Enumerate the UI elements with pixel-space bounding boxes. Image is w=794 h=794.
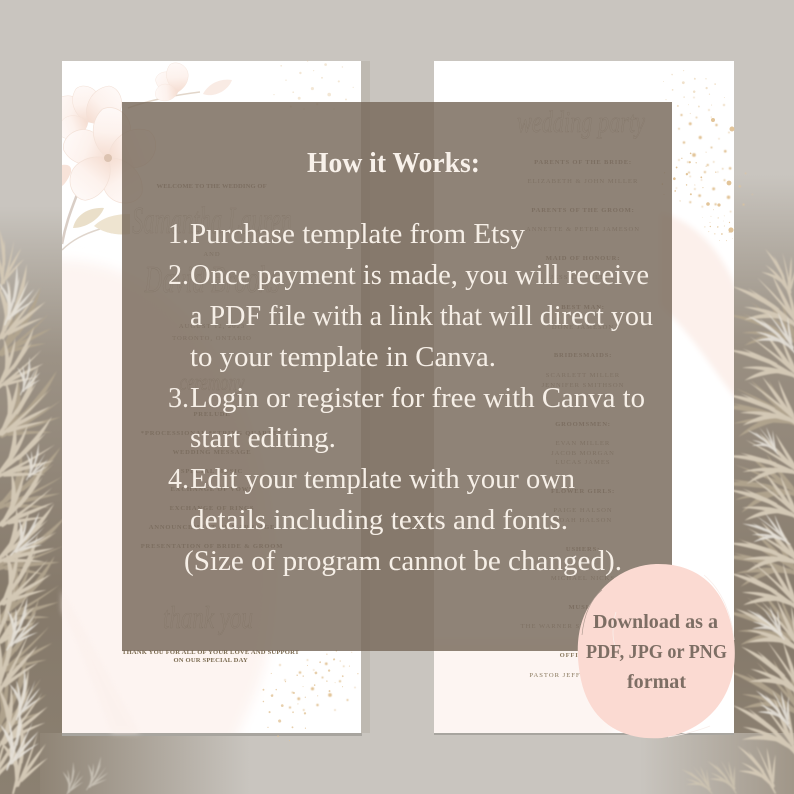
step 4: details including texts and fonts. (190, 505, 568, 536)
wedding party list: EVAN MILLER (556, 440, 610, 447)
gold speckles top right 4 (653, 143, 723, 210)
wedding party list: JESSICA MILLER (550, 274, 616, 281)
invitation text: WEDDING MESSAGE (173, 449, 251, 456)
panel: how it works overlay (122, 102, 672, 651)
step 3 (168, 383, 645, 454)
invitation text: Samantha Lauren (132, 200, 292, 242)
callout text: format (627, 671, 686, 693)
invitation text: thank you (163, 599, 253, 635)
wedding party list: JACOB MORGAN (551, 450, 615, 457)
flower buds (73, 208, 104, 228)
invitation text: AND (203, 251, 221, 258)
step 1: 1. (168, 219, 189, 250)
step 2: to your template in Canva. (190, 342, 496, 373)
invitation text: WELCOME TO THE WEDDING OF (156, 183, 268, 190)
wedding party list (517, 104, 645, 630)
wedding party list: MAID OF HONOUR: (546, 255, 620, 262)
watercolor wash (62, 262, 266, 733)
watercolor wash bottom (434, 651, 612, 733)
invitation text: EXCHANGE OF RINGS (170, 505, 254, 512)
wedding party list: MICHAEL NICKS (551, 575, 615, 582)
top bud (203, 80, 232, 95)
left edge petal (62, 165, 71, 186)
step 1: Purchase template from Etsy (190, 219, 525, 250)
step 4: Edit your template with your own (190, 464, 575, 495)
invitation text: TORONTO, ONTARIO (172, 335, 252, 342)
numbered steps (168, 219, 653, 577)
callout dark scratch (582, 590, 602, 635)
officiant: PASTOR JEFFREY JAMESON (529, 672, 637, 679)
card sheet (62, 61, 361, 733)
step 2 (168, 260, 653, 373)
wedding party list: NOAH HALSON (554, 517, 612, 524)
callout text (586, 611, 727, 693)
gold speckles: lower right (272, 659, 356, 711)
gold speckles top right 2 (673, 156, 757, 216)
invitation text: ANNOUNCEMENT OF MARRIAGE (149, 524, 275, 531)
step 3: 3. (168, 383, 189, 414)
wedding party list: PARENTS OF THE BRIDE: (534, 159, 632, 166)
callout text: Download as a (593, 611, 718, 633)
thank you note (122, 649, 300, 664)
size note: (Size of program cannot be changed). (184, 546, 622, 577)
invitation text: SPECIAL MUSIC (181, 468, 243, 475)
wedding party list: FLOWER GIRLS: (551, 488, 615, 495)
callout: download formats (578, 564, 735, 738)
wedding party list: SCARLETT MILLER (546, 372, 620, 379)
callout blob (578, 564, 735, 738)
panel: left program card (58, 60, 361, 741)
officiant: OFFICIANT: (560, 652, 606, 659)
wedding party list: THE WARNER STRING QUARTET (521, 623, 645, 630)
watercolor wash top right (672, 216, 734, 396)
panel: right program card (420, 61, 757, 745)
invitation text: PRELUDE (193, 411, 231, 418)
wedding party list: BEST MAN: (561, 304, 605, 311)
invitation text: AUGUST 12, 2023 (179, 323, 245, 330)
thank you note: ON OUR SPECIAL DAY (174, 657, 248, 664)
gold speckles: lower right 3 (294, 642, 365, 704)
wedding party list: PARENTS OF THE GROOM: (531, 207, 635, 214)
wedding party list: BRIDESMAIDS: (554, 352, 612, 359)
invitation text: EXCHANGE OF VOWS (170, 486, 254, 493)
step 2: Once payment is made, you will receive (190, 260, 649, 291)
wedding party list: MUSIC: (569, 604, 597, 611)
gold speckles: top right (273, 60, 354, 110)
wedding party list: ELIZABETH & JOHN MILLER (528, 178, 638, 185)
gold speckles top right 1 (678, 97, 730, 181)
gold speckles top right 3 (656, 65, 729, 123)
wedding party list: PAIGE HALSON (553, 507, 613, 514)
gold speckles top right 5 (698, 206, 741, 247)
wedding party list: wedding party (517, 104, 645, 139)
invitation text: PRESENTATION OF BRIDE & GROOM (141, 543, 283, 550)
back flower (62, 86, 122, 138)
card sheet (434, 61, 734, 733)
wedding party list: JENNIFER SMITHSON (542, 382, 624, 389)
wedding party list: ANNETTE & PETER JAMESON (526, 226, 640, 233)
step 2: 2. (168, 260, 189, 291)
watercolor streak (62, 590, 140, 733)
invitation text: David Brooks (144, 259, 280, 301)
main flower (63, 107, 122, 204)
top flower (155, 62, 188, 101)
invitation text: *PROCESSIONAL *STRING QUARTET (141, 430, 283, 437)
step 2: a PDF file with a link that will direct you (190, 301, 653, 332)
gold speckle clump (706, 118, 734, 233)
step 4 (168, 464, 575, 536)
wedding party list: LUCAS JAMES (555, 459, 611, 466)
wedding party list: GROOMSMEN: (555, 421, 611, 428)
wedding party list: DONE JAMESON (552, 324, 614, 331)
brush marks (613, 575, 734, 737)
invitation text (132, 183, 292, 635)
officiant (529, 652, 637, 679)
flower stems (62, 192, 78, 244)
step 3: Login or register for free with Canva to (190, 383, 645, 414)
step 3: start editing. (190, 423, 336, 454)
floral illustration (47, 62, 232, 250)
heading: How it Works: How it Works: (307, 147, 480, 179)
callout text: PDF, JPG or PNG (586, 641, 727, 663)
decorative pampas grass: left (0, 227, 116, 794)
step 4: 4. (168, 464, 189, 495)
thank you note: THANK YOU FOR ALL OF YOUR LOVE AND SUPPORT (122, 649, 300, 656)
decorative pampas grass: right (677, 244, 794, 794)
invitation text: ceremony (180, 370, 245, 396)
gold speckles: lower right 2 (258, 668, 313, 745)
wedding party list: USHERS: (566, 546, 600, 553)
